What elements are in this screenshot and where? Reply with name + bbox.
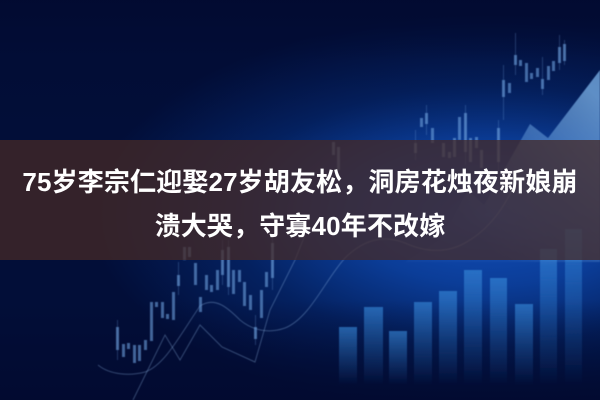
title <box>22 167 578 241</box>
title line 1: 75岁李宗仁迎娶27岁胡友松，洞房花烛夜新娘崩 <box>22 167 578 197</box>
trend lines <box>98 190 512 400</box>
candlestick wicks <box>118 33 564 360</box>
bar chart <box>339 229 582 385</box>
title band <box>0 140 600 260</box>
mountain area shape <box>405 70 600 262</box>
title line 2: 溃大哭，守寡40年不改嫁 <box>155 211 445 241</box>
candlestick chart <box>116 44 566 363</box>
